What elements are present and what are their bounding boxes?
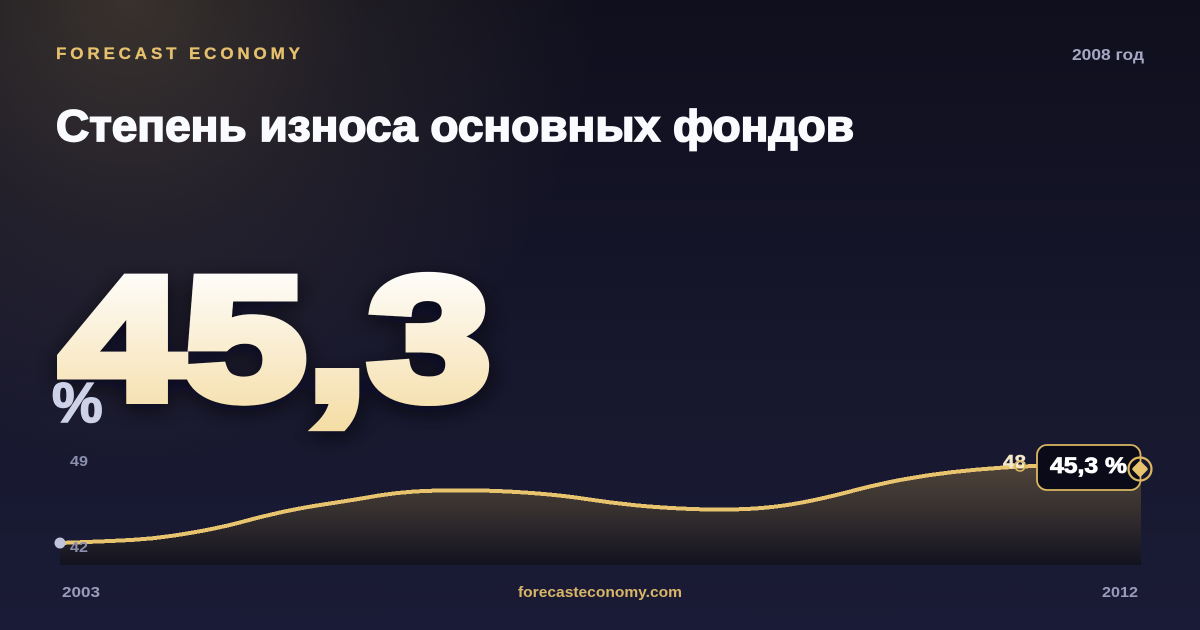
axis max label: 49 xyxy=(70,454,88,470)
year label: 2008 год xyxy=(1072,47,1144,64)
peak label: 48 xyxy=(1003,451,1026,472)
brand label: FORECAST ECONOMY xyxy=(56,44,301,63)
value callout: 45,3 % xyxy=(1050,453,1127,478)
source url: forecasteconomy.com xyxy=(518,585,682,601)
chart area fill xyxy=(60,466,1141,565)
peak marker xyxy=(1015,461,1025,471)
title: Степень износа основных фондов xyxy=(56,102,854,151)
value callout xyxy=(1037,445,1140,490)
percent sign: % xyxy=(52,371,103,435)
big value: 45,3 xyxy=(60,241,491,437)
start point xyxy=(54,538,66,548)
chart line xyxy=(60,466,1040,543)
line chart xyxy=(54,445,1152,565)
end point marker xyxy=(1128,458,1152,480)
end year: 2012 xyxy=(1102,585,1138,601)
start year: 2003 xyxy=(62,585,100,601)
axis min label: 42 xyxy=(70,540,88,556)
